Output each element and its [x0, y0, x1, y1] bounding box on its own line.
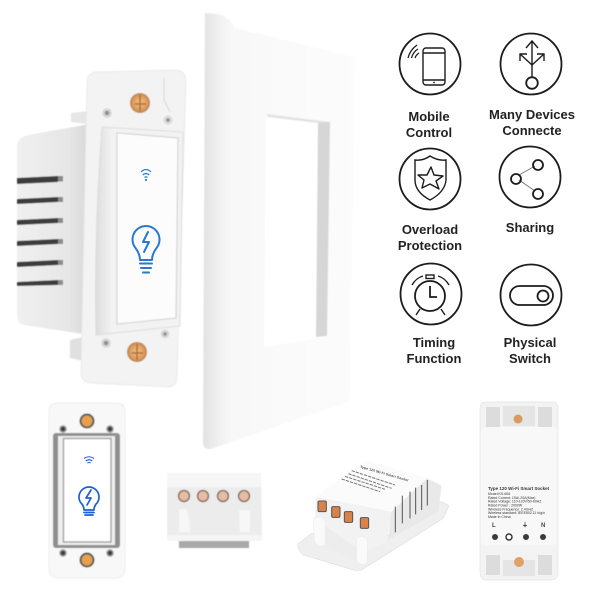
rating label: Made in China	[488, 515, 511, 519]
label: physical switch: Switch	[509, 351, 551, 366]
rating label: N	[541, 523, 545, 529]
rating label: ⏚	[522, 522, 528, 529]
rating label	[488, 486, 550, 529]
back view module	[480, 402, 558, 580]
back cutouts	[486, 406, 552, 576]
front view switch	[49, 403, 125, 578]
module top label: Type 120 Wi-Fi Smart Socket	[360, 465, 410, 483]
rating label: Model:KS-606	[488, 492, 510, 496]
terminal holes	[492, 534, 546, 540]
icon: bulb small	[79, 487, 99, 515]
terminal connector view	[167, 473, 262, 548]
screws and holes	[60, 414, 113, 568]
label: timing function: Timing	[413, 335, 455, 350]
label: timing function: Function	[407, 351, 461, 366]
label: mobile control: Control	[406, 125, 452, 140]
plate window	[264, 115, 330, 347]
rating label: Rated Voltage: 110-120V/50-60HZ	[488, 500, 542, 504]
rating label: L	[492, 523, 496, 529]
mounting plate	[81, 70, 186, 387]
icon: timing function	[400, 264, 462, 324]
screw bottom	[127, 342, 147, 362]
label: physical switch: Physical	[504, 335, 556, 350]
icon: wifi small	[84, 457, 94, 463]
switch face	[96, 127, 183, 335]
label: overload protection: Protection	[398, 238, 462, 253]
touch panel	[64, 438, 111, 542]
touch panel	[117, 133, 178, 324]
rating label: Rated Power : 2000W	[488, 504, 523, 508]
rating label: Wireless Frequency: 2.4GHZ	[488, 508, 534, 512]
rating label: Wireless standard: IEEE802.11 b/g/n	[488, 511, 545, 515]
rating label: Type 120 Wi-Fi Smart Socket	[488, 486, 550, 491]
feature icons	[398, 34, 575, 366]
icon: overload protection	[400, 148, 460, 210]
icon: wifi	[141, 170, 151, 180]
icon: mobile control	[400, 34, 460, 94]
rating label: Rated Current: 15A/-20A(Max)	[488, 496, 535, 500]
label: mobile control: Mobile	[408, 109, 450, 124]
angled module view	[298, 460, 449, 571]
label: overload protection: Overload	[402, 222, 458, 237]
mounting holes	[102, 110, 171, 346]
vents	[395, 480, 427, 532]
terminals	[318, 501, 369, 528]
wall plate cover	[203, 13, 355, 449]
label: sharing: Sharing	[506, 220, 554, 235]
switch side body with vents	[17, 111, 90, 362]
icon: many devices	[500, 34, 562, 94]
main switch module	[17, 70, 186, 387]
icon: sharing	[500, 146, 560, 208]
icon: physical switch	[500, 264, 562, 326]
screws	[514, 414, 522, 424]
screw top	[130, 93, 150, 113]
icon: bulb	[132, 226, 159, 272]
label: many devices: Many Devices	[489, 107, 575, 122]
label: many devices: Connecte	[502, 123, 562, 138]
terminals	[178, 490, 250, 502]
